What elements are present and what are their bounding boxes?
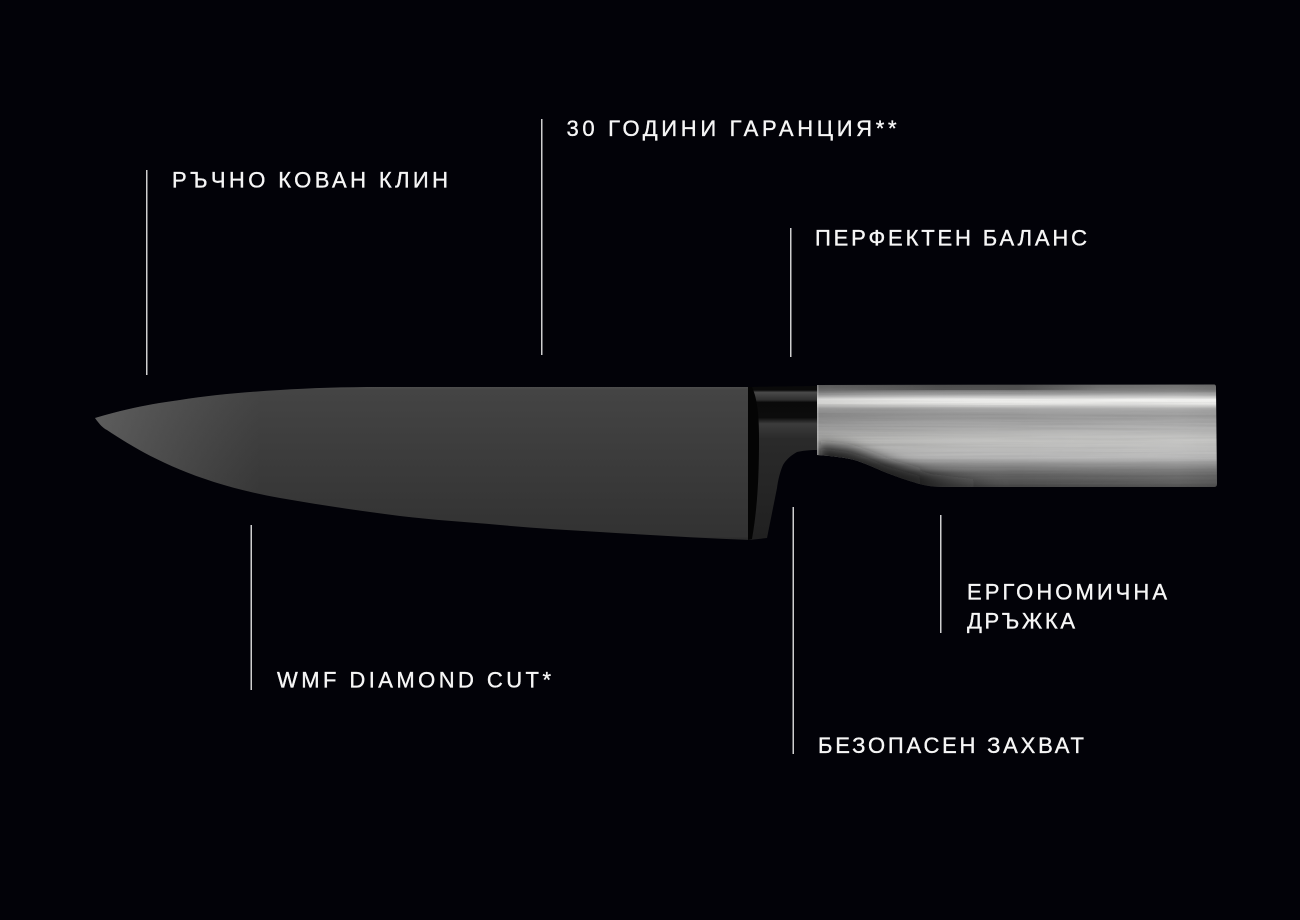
callout: diamond cut: WMF DIAMOND CUT* — [277, 668, 551, 692]
infographic: knife feature diagram — [95, 119, 1217, 754]
knife bolster — [748, 386, 817, 540]
knife blade — [95, 387, 749, 540]
callout: ergonomic handle: ДРЪЖКА — [967, 608, 1075, 634]
callout: warranty: 30 ГОДИНИ ГАРАНЦИЯ** — [566, 116, 897, 141]
callout: forged blade: РЪЧНО КОВАН КЛИН — [172, 167, 448, 192]
callout: ergonomic handle: ЕРГОНОМИЧНА — [967, 580, 1167, 604]
knife handle — [817, 384, 1217, 492]
callout: safe grip: БЕЗОПАСЕН ЗАХВАТ — [818, 733, 1084, 758]
callout: ergonomic handle — [940, 515, 1167, 634]
knife illustration — [95, 384, 1217, 540]
callout: balance: ПЕРФЕКТЕН БАЛАНС — [815, 226, 1087, 250]
